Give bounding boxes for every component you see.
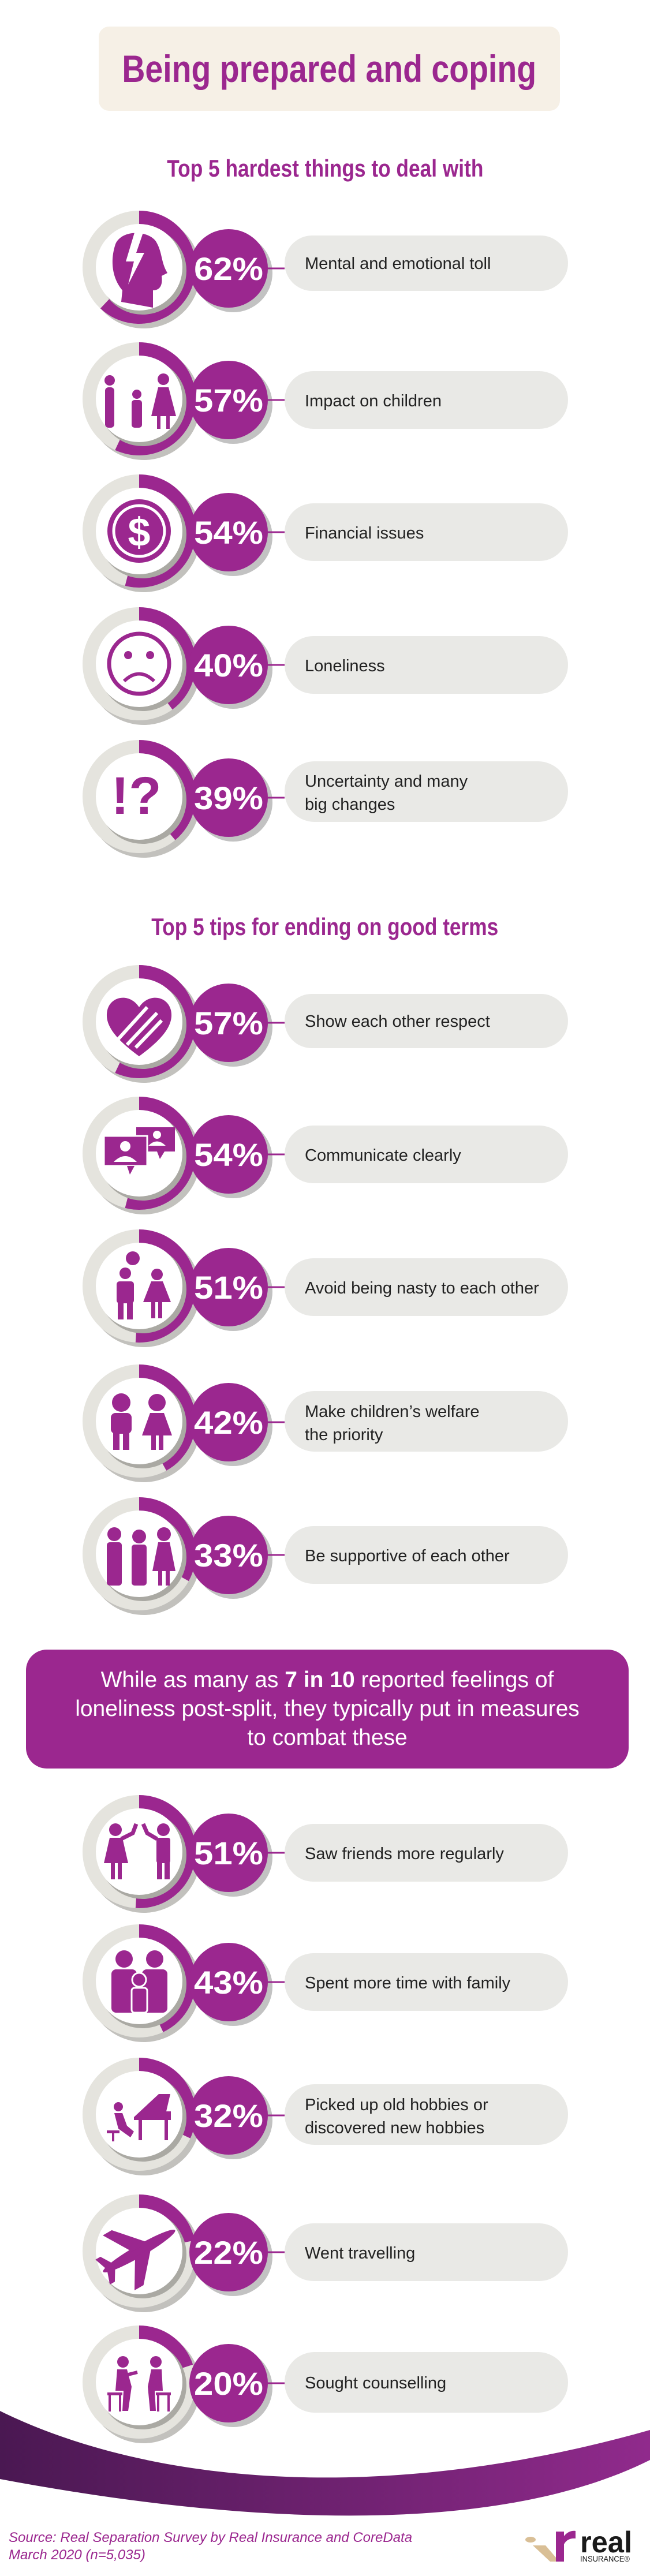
row: loneliness 40%: 40% (194, 647, 263, 683)
row: children welfare 42%: 42% (194, 1404, 263, 1441)
icon: airplane (87, 2203, 191, 2300)
callout: loneliness: to combat these (247, 1725, 408, 1750)
source note (9, 2530, 412, 2563)
row: family 43%: Spent more time with family (305, 1974, 511, 1992)
row: supportive 33%: 33% (194, 1537, 263, 1573)
row: children 57%: 57% (194, 382, 263, 418)
source note: Source: Real Separation Survey by Real Insurance and CoreData (9, 2530, 412, 2545)
row: children 57%: Impact on children (305, 392, 442, 410)
heading: hardest things: Top 5 hardest things to deal with (167, 155, 483, 182)
row: friends 51%: 51% (194, 1835, 263, 1871)
row: family 43% (83, 1924, 568, 2042)
bottom wave (0, 2411, 650, 2515)
row: children welfare 42%: the priority (305, 1426, 383, 1444)
row: loneliness 40%: Loneliness (305, 657, 385, 675)
row: financial 54% (83, 474, 568, 592)
row: children welfare 42%: Make children’s welfare (305, 1403, 479, 1421)
row: travelling 22%: 22% (194, 2234, 263, 2271)
title (99, 27, 560, 111)
row: avoid nasty 51% (83, 1229, 568, 1347)
row: financial 54%: Financial issues (305, 524, 424, 543)
logo: real insurance: INSURANCE® (580, 2554, 630, 2563)
icon: dollar coin: $ (128, 510, 150, 555)
row: mental 62%: Mental and emotional toll (305, 255, 491, 273)
row: mental 62%: 62% (194, 251, 263, 287)
row: hobbies 32%: 32% (194, 2098, 263, 2134)
row: communicate 54% (83, 1097, 568, 1214)
icon: speech bubbles (104, 1127, 175, 1175)
row: uncertainty 39% (83, 740, 568, 858)
row: supportive 33% (83, 1497, 568, 1615)
row: travelling 22% (83, 2194, 568, 2312)
row: financial 54%: 54% (194, 514, 263, 551)
row: respect 57%: 57% (194, 1005, 263, 1041)
callout: loneliness (26, 1650, 629, 1769)
row: hobbies 32% (83, 2058, 568, 2175)
heading: tips: Top 5 tips for ending on good terms (151, 913, 499, 940)
row: hobbies 32%: discovered new hobbies (305, 2119, 484, 2137)
icon: arguing couple (117, 1251, 171, 1319)
row: communicate 54%: Communicate clearly (305, 1146, 461, 1165)
row: children 57% (83, 342, 568, 460)
logo: real insurance (525, 2528, 632, 2563)
row: respect 57%: Show each other respect (305, 1012, 490, 1031)
row: uncertainty 39%: Uncertainty and many (305, 772, 468, 791)
row: travelling 22%: Went travelling (305, 2244, 415, 2263)
callout: loneliness: loneliness post-split, they typically put in measures (75, 1696, 580, 1721)
row: counselling 20% (83, 2325, 568, 2443)
icon: piano player (107, 2094, 171, 2141)
source note: March 2020 (n=5,035) (9, 2547, 145, 2563)
row: hobbies 32%: Picked up old hobbies or (305, 2096, 488, 2114)
icon: family walking (104, 373, 176, 429)
row: children welfare 42% (83, 1364, 568, 1482)
row: supportive 33%: Be supportive of each other (305, 1547, 510, 1565)
row: counselling 20%: 20% (194, 2365, 263, 2402)
icon: head with lightning (113, 233, 167, 308)
icon: friends high five (104, 1823, 170, 1879)
row: avoid nasty 51%: Avoid being nasty to each other (305, 1279, 539, 1298)
row: uncertainty 39%: big changes (305, 795, 395, 814)
icon: boy and girl (111, 1393, 172, 1450)
row: friends 51% (83, 1795, 568, 1913)
title: Being prepared and coping (122, 47, 536, 90)
row: family 43%: 43% (194, 1964, 263, 2001)
icon: heart handshake (107, 998, 171, 1056)
icon: sad face (109, 634, 169, 694)
icon: !?: !? (111, 767, 161, 825)
icon: three people (107, 1527, 175, 1586)
row: respect 57% (83, 965, 568, 1083)
callout: loneliness: While as many as 7 in 10 reported feelings of (101, 1668, 554, 1692)
icon: dollar coin (107, 499, 171, 563)
row: friends 51%: Saw friends more regularly (305, 1845, 504, 1863)
icon: family group (111, 1950, 167, 2013)
row: mental 62% (83, 211, 568, 328)
row: uncertainty 39%: 39% (194, 780, 263, 816)
row: counselling 20%: Sought counselling (305, 2374, 446, 2392)
icon: counselling pair (107, 2356, 171, 2412)
row: loneliness 40% (83, 607, 568, 725)
row: avoid nasty 51%: 51% (194, 1269, 263, 1306)
row: communicate 54%: 54% (194, 1136, 263, 1173)
